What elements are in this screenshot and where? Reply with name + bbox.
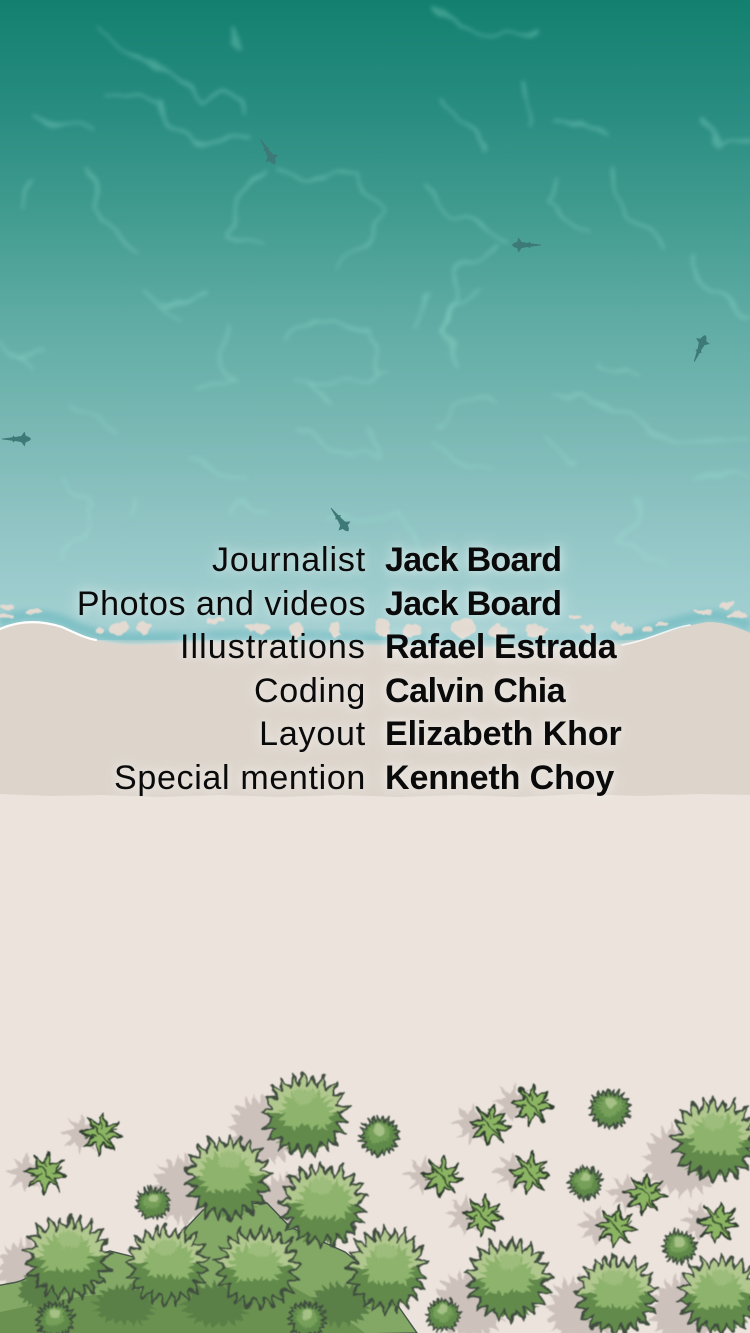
wave edge highlight	[0, 622, 690, 645]
palm	[592, 1203, 640, 1251]
name: Calvin Chia: Calvin Chia	[385, 672, 565, 710]
large tree	[124, 1224, 210, 1306]
palm	[621, 1170, 669, 1218]
shark 4	[2, 432, 31, 446]
shallow water band	[0, 615, 750, 641]
palm	[418, 1153, 466, 1201]
palm	[22, 1149, 70, 1197]
sea foam	[0, 599, 747, 638]
role: special mention: Special mention	[114, 758, 366, 796]
role: photos and videos: Photos and videos	[77, 584, 366, 622]
round bush	[425, 1298, 461, 1332]
role: coding: Coding	[254, 672, 366, 710]
round bush	[287, 1301, 327, 1333]
shark 5	[325, 504, 354, 536]
large tree	[184, 1134, 272, 1222]
sharks	[2, 135, 712, 536]
name: Jack Board: Jack Board	[385, 584, 561, 622]
role: illustrations: Illustrations	[180, 628, 366, 666]
large tree	[465, 1237, 553, 1323]
wet sand	[0, 622, 750, 797]
trees	[22, 1072, 750, 1333]
palm	[459, 1192, 507, 1240]
name: Rafael Estrada: Rafael Estrada	[385, 628, 616, 666]
round bush	[589, 1089, 631, 1129]
palm	[694, 1199, 742, 1247]
water caustics	[0, 10, 750, 570]
large tree	[670, 1097, 750, 1183]
shark 3	[687, 332, 712, 365]
credits list	[74, 540, 622, 796]
palm	[466, 1101, 514, 1149]
shark 1	[254, 135, 281, 168]
water background	[0, 0, 750, 640]
palm	[506, 1149, 554, 1197]
tree shadows on hill	[17, 1269, 373, 1329]
large tree	[573, 1254, 659, 1333]
shark 2	[512, 238, 541, 252]
large tree	[23, 1215, 113, 1301]
palm	[77, 1110, 125, 1158]
tree shadows on sand	[0, 1080, 724, 1333]
round bush	[661, 1230, 697, 1264]
palm	[508, 1081, 556, 1129]
large tree	[215, 1226, 301, 1310]
grassy hill	[0, 1203, 417, 1333]
round bush	[358, 1116, 400, 1156]
role: layout: Layout	[259, 715, 366, 753]
name: Jack Board: Jack Board	[385, 541, 561, 579]
large tree	[346, 1226, 428, 1314]
large tree	[278, 1162, 368, 1248]
large tree	[261, 1072, 349, 1158]
name: Elizabeth Khor: Elizabeth Khor	[385, 715, 622, 753]
round bush	[35, 1301, 75, 1333]
role: journalist: Journalist	[212, 541, 366, 579]
name: Kenneth Choy: Kenneth Choy	[385, 758, 614, 796]
round bush	[567, 1166, 603, 1200]
large tree	[677, 1254, 750, 1333]
round bush	[135, 1186, 171, 1220]
